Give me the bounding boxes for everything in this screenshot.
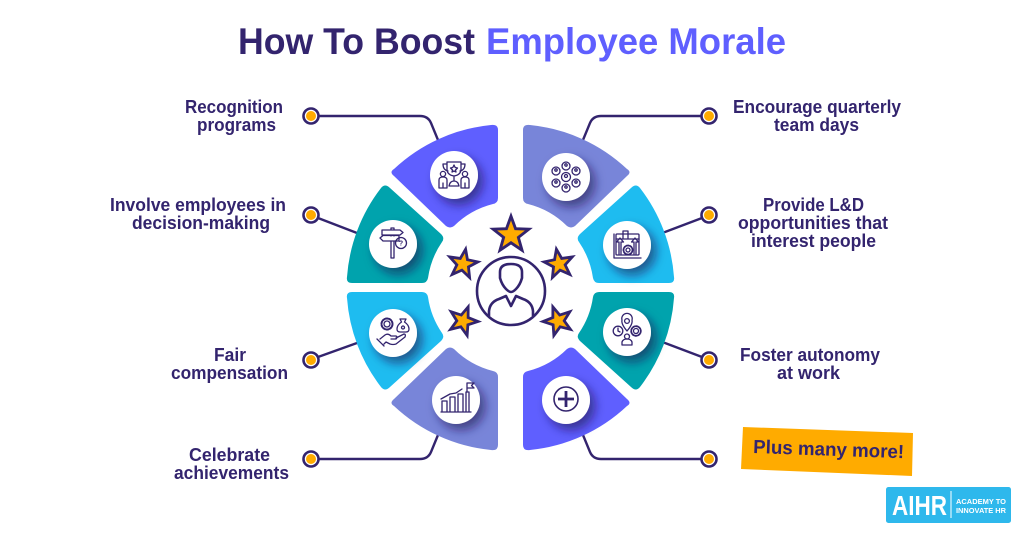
logo: AIHR <box>886 487 1011 523</box>
label: celebrate achievements: Celebrate <box>189 445 270 465</box>
label: quarterly team days <box>733 97 901 135</box>
label: L&D opportunities: opportunities that <box>738 213 888 233</box>
title: Employee Morale <box>486 21 786 62</box>
star: lower left <box>445 302 482 337</box>
icon: signpost with question mark: ? <box>399 240 403 248</box>
segment: fair compensation <box>347 292 443 390</box>
label: celebrate achievements: achievements <box>174 463 289 483</box>
logo: AIHR: ACADEMY TO <box>956 497 1006 506</box>
center icon: employee with five stars <box>445 216 576 337</box>
connector: fair compensation <box>304 343 357 368</box>
icon: trophy with two people <box>439 162 469 188</box>
label: recognition programs <box>185 97 283 135</box>
label: fair compensation: compensation <box>171 363 288 383</box>
icon: browser window with gear and arrows <box>614 231 641 258</box>
segment: involve employees in decision-making <box>347 186 443 283</box>
title: How To Boost <box>238 21 475 62</box>
segment: foster autonomy at work <box>578 292 674 390</box>
connector: foster autonomy <box>665 343 716 368</box>
star: lower right <box>539 302 576 337</box>
label: recognition programs: programs <box>197 115 276 135</box>
icon: plus in circle <box>554 387 578 411</box>
label: foster autonomy <box>740 345 880 383</box>
label: celebrate achievements <box>174 445 289 483</box>
label: recognition programs: Recognition <box>185 97 283 117</box>
icon: people network <box>552 162 580 192</box>
label: involve employees: decision-making <box>132 213 270 233</box>
icon: employee portrait <box>477 257 545 325</box>
label: foster autonomy: Foster autonomy <box>740 345 880 365</box>
icon: rising bar chart with flag <box>441 383 474 412</box>
connector: celebrate achievements <box>304 435 438 466</box>
segment: celebrate achievements <box>392 348 498 450</box>
label: involve employees: Involve employees in <box>110 195 286 215</box>
label: quarterly team days: team days <box>774 115 859 135</box>
connector: recognition programs <box>304 108 438 140</box>
star: top <box>493 216 529 250</box>
icon: pin, clock, gear and person <box>613 313 641 345</box>
logo: AIHR: INNOVATE HR <box>956 506 1007 515</box>
label: foster autonomy: at work <box>777 363 841 383</box>
label: L&D opportunities: interest people <box>751 231 876 251</box>
connector: L&D opportunities <box>665 208 716 232</box>
title <box>238 21 786 62</box>
callout: plus many more <box>741 427 913 476</box>
segment: encourage quarterly team days <box>523 125 630 228</box>
segment: plus many more <box>523 348 630 450</box>
label: fair compensation <box>171 345 288 383</box>
label: fair compensation: Fair <box>214 345 246 365</box>
connector: involve employees <box>304 208 357 233</box>
label: quarterly team days: Encourage quarterly <box>733 97 901 117</box>
icon: hand holding gear and money bag <box>377 318 409 346</box>
callout: plus many more: Plus many more! <box>753 437 904 463</box>
label: L&D opportunities <box>738 195 888 251</box>
connector: plus many more <box>583 435 716 466</box>
segment: recognition programs <box>392 125 498 228</box>
connector: quarterly team days <box>583 108 716 140</box>
segment: provide L&D opportunities <box>578 186 674 283</box>
star: upper right <box>542 247 575 278</box>
star: upper left <box>447 247 480 278</box>
logo: AIHR: AIHR <box>892 490 947 521</box>
label: L&D opportunities: Provide L&D <box>763 195 864 215</box>
label: involve employees <box>110 195 286 233</box>
